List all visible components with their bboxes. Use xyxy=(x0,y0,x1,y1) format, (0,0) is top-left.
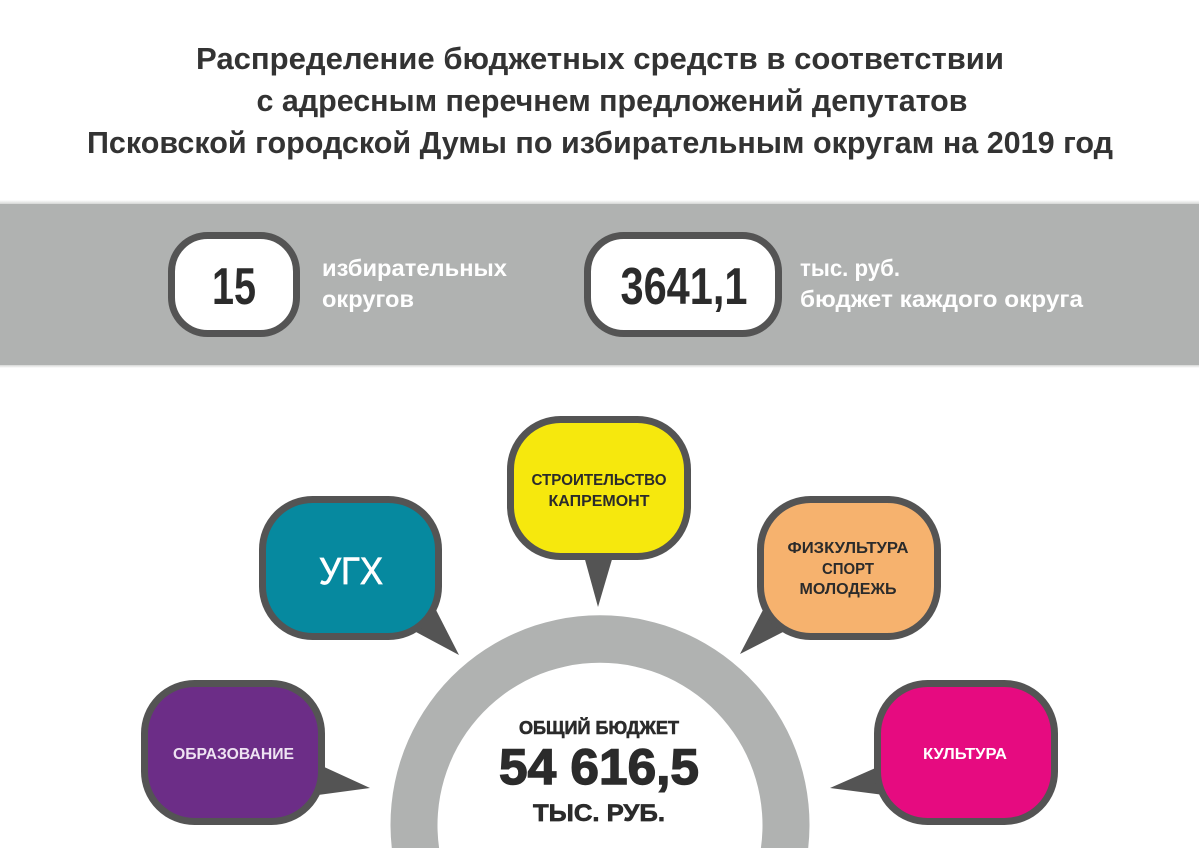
text: district budget label: бюджет каждого округа xyxy=(800,286,1083,312)
title xyxy=(87,41,1113,160)
bubble: education xyxy=(144,684,370,822)
bubble: education: ОБРАЗОВАНИЕ xyxy=(173,746,294,763)
text: total budget: ТЫС. РУБ. xyxy=(533,800,665,827)
text: total budget: ОБЩИЙ БЮДЖЕТ xyxy=(519,717,679,738)
text: districts label xyxy=(322,255,507,312)
bubble: construction xyxy=(510,420,688,607)
stat: district budget xyxy=(588,236,778,334)
stat: districts count xyxy=(172,236,296,334)
chart: total budget ring xyxy=(390,615,809,848)
text: districts label: избирательных xyxy=(322,255,507,281)
panel: summary strip xyxy=(0,200,1199,368)
stat: districts count: 15 xyxy=(212,258,256,316)
bubble: sport xyxy=(740,500,938,654)
text: district budget label: тыс. руб. xyxy=(800,255,900,281)
title: Псковской городской Думы по избирательным округам на 2019 год xyxy=(87,125,1113,160)
bubble: construction: КАПРЕМОНТ xyxy=(548,493,650,510)
bubble: sport: ФИЗКУЛЬТУРА xyxy=(788,540,909,557)
title: с адресным перечнем предложений депутатов xyxy=(256,83,968,118)
bubble: sport: МОЛОДЕЖЬ xyxy=(800,581,896,598)
bubble: culture xyxy=(830,684,1054,822)
text: district budget label xyxy=(800,255,1083,312)
title: Распределение бюджетных средств в соответствии xyxy=(196,41,1004,76)
text: total budget xyxy=(499,717,699,827)
text: districts label: округов xyxy=(322,286,414,312)
bubble: construction: СТРОИТЕЛЬСТВО xyxy=(532,472,666,489)
bubble: culture: КУЛЬТУРА xyxy=(923,746,1007,763)
bubble: UGH: УГХ xyxy=(319,551,383,593)
bubble: sport: СПОРТ xyxy=(822,561,874,578)
stat: district budget: 3641,1 xyxy=(620,258,748,316)
text: total budget: 54 616,5 xyxy=(499,739,699,795)
bubble: UGH xyxy=(262,500,459,655)
